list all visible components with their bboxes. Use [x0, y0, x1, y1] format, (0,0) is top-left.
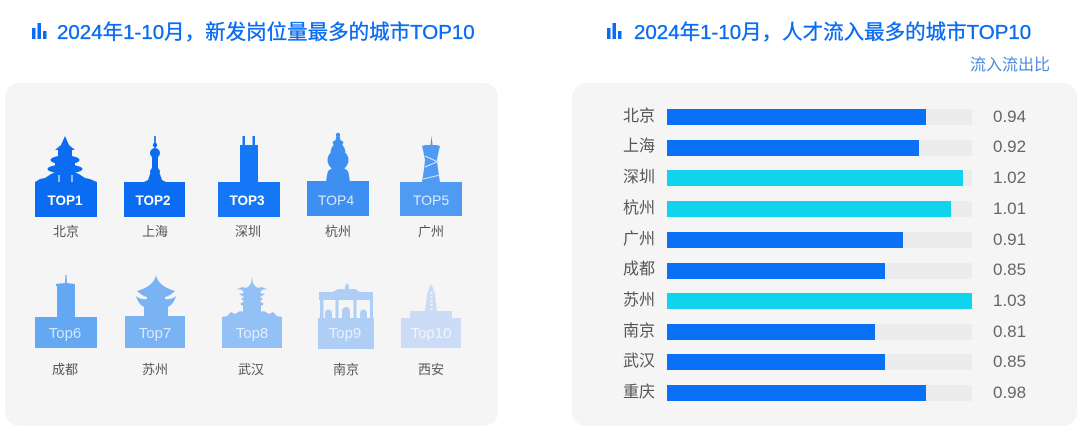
bar row: 广州: 0.91 [993, 230, 1026, 249]
icon: TOP3 Shenzhen [218, 136, 280, 217]
bar row: 广州: 广州 [623, 230, 655, 248]
bar row: 成都 [623, 260, 1026, 279]
bar row: 武汉: 武汉 [623, 352, 655, 370]
bar row: 重庆 [623, 383, 1026, 402]
bar row: 深圳 [623, 168, 1026, 187]
bar row: 武汉: 0.85 [993, 352, 1026, 371]
panel background left [5, 83, 498, 426]
label: TOP1 [47, 193, 83, 208]
label: Top10 [411, 325, 451, 342]
bar row: 武汉 [623, 352, 1026, 371]
city: Beijing: 北京 [53, 224, 79, 239]
column label: inflow outflow ratio: 流入流出比 [970, 56, 1050, 74]
bar row: 杭州 [623, 199, 1026, 218]
label: Top7 [139, 325, 171, 342]
label: TOP5 [413, 192, 449, 208]
left heading text: 2024年1-10月，新发岗位量最多的城市TOP10 [57, 21, 475, 44]
bar row: 广州 [623, 230, 1026, 249]
label: Top8 [236, 325, 268, 342]
icon: Top9 Nanjing [318, 283, 374, 349]
bar row: 苏州 [623, 291, 1026, 310]
right heading text: 2024年1-10月，人才流入最多的城市TOP10 [634, 21, 1031, 44]
bar row: 深圳: 深圳 [623, 168, 655, 186]
icon: TOP2 Shanghai [124, 136, 185, 217]
panel: talent inflow [572, 83, 1077, 426]
bar row: 上海 [623, 137, 1026, 156]
icon: TOP1 Beijing [35, 136, 97, 217]
bar row: 上海: 0.92 [993, 137, 1026, 156]
bar row: 杭州: 1.01 [993, 199, 1026, 218]
bar row: 深圳: 1.02 [993, 168, 1026, 187]
panel: job ranking [5, 83, 498, 426]
city: Suzhou: 苏州 [142, 362, 168, 377]
panel background right [572, 83, 1077, 426]
city: Nanjing: 南京 [333, 362, 359, 377]
icon: TOP4 Hangzhou [307, 133, 369, 216]
label: TOP4 [318, 192, 354, 208]
right heading [607, 21, 1031, 44]
city: Guangzhou: 广州 [418, 224, 444, 239]
left heading [32, 21, 475, 44]
bar row: 苏州: 苏州 [623, 291, 655, 309]
icon: Top7 Suzhou [125, 275, 185, 348]
bar row: 南京 [623, 322, 1026, 341]
label: TOP3 [229, 193, 265, 208]
bar row: 南京: 0.81 [993, 322, 1026, 341]
bar row: 成都: 成都 [623, 260, 655, 278]
bar row: 北京 [623, 107, 1026, 126]
icon: TOP5 Guangzhou [400, 135, 462, 216]
city: Shenzhen: 深圳 [235, 224, 261, 239]
label: Top6 [49, 325, 81, 342]
icon: right heading bars [607, 23, 622, 39]
bar row: 上海: 上海 [623, 137, 655, 155]
icon: left heading bars [32, 23, 46, 39]
city: Xi'an: 西安 [418, 362, 444, 377]
city: Hangzhou: 杭州 [325, 224, 351, 239]
bar row: 北京: 0.94 [993, 107, 1026, 126]
bar row: 重庆: 0.98 [993, 383, 1026, 402]
icon: Top6 Chengdu [35, 275, 97, 348]
bar row: 南京: 南京 [623, 322, 655, 340]
city: Chengdu: 成都 [52, 362, 78, 377]
bar row: 苏州: 1.03 [993, 291, 1026, 310]
city: Shanghai: 上海 [142, 224, 168, 239]
city: Wuhan: 武汉 [238, 362, 264, 377]
icon: Top8 Wuhan [222, 277, 282, 348]
label: TOP2 [135, 193, 171, 208]
label: Top9 [329, 325, 361, 342]
bar row: 杭州: 杭州 [623, 199, 655, 217]
bar row: 重庆: 重庆 [623, 383, 655, 401]
icon: Top10 Xi'an [401, 285, 461, 348]
bar row: 成都: 0.85 [993, 260, 1026, 279]
bar row: 北京: 北京 [623, 107, 655, 125]
